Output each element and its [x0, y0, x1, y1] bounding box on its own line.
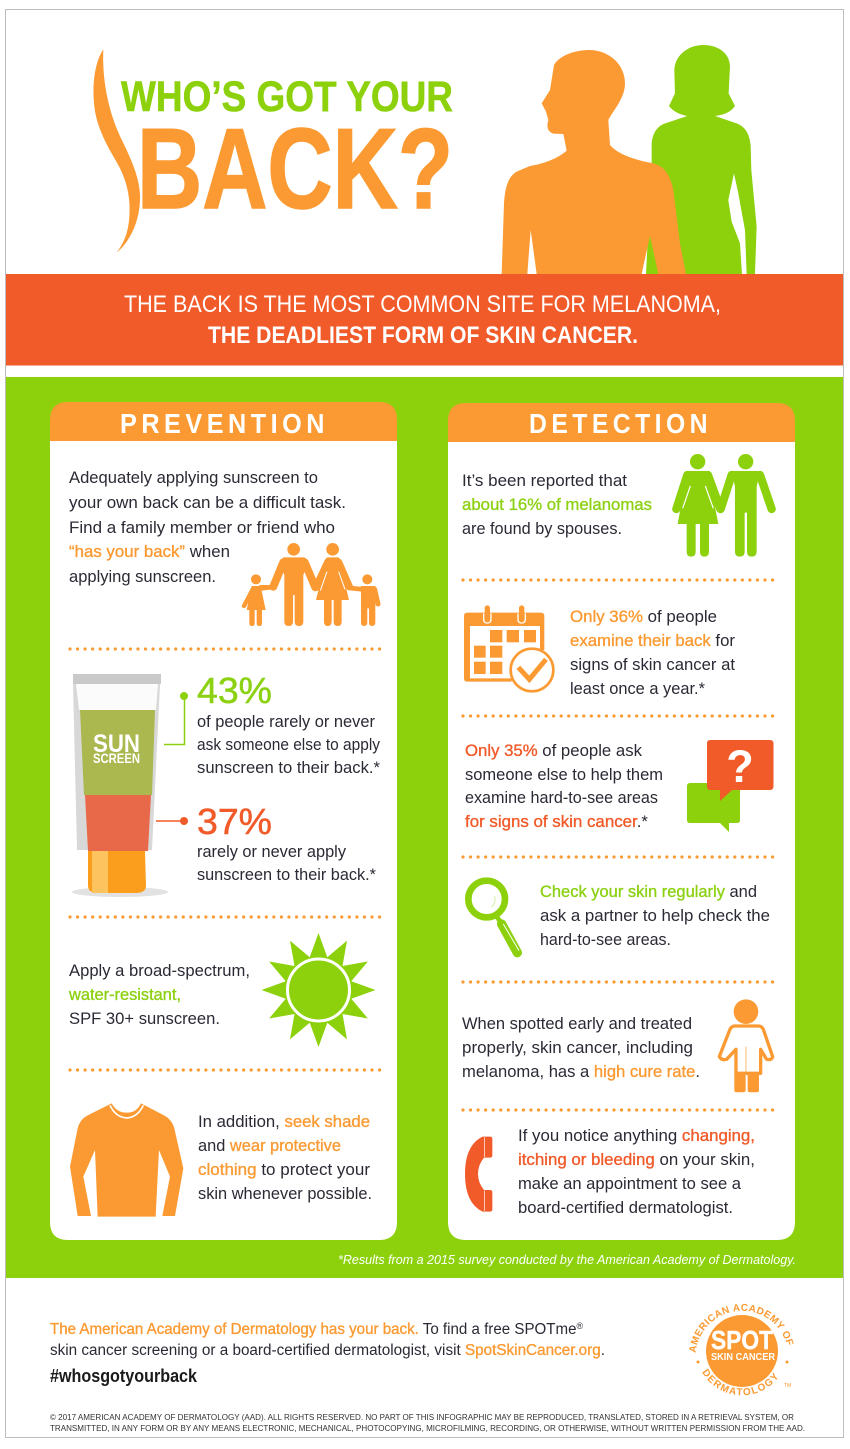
- text: applying sunscreen: Find a family member or friend who: [69, 518, 335, 537]
- label: sun screen: SUN: [93, 730, 140, 758]
- text: examine their back: examine their back for: [570, 631, 735, 650]
- icon: couple: [676, 454, 772, 557]
- logo: spot skin cancer: SKIN CANCER: [711, 1352, 776, 1363]
- copyright: TRANSMITTED, IN ANY FORM OR BY ANY MEANS ELECTRONIC, MECHANICAL, PHOTOCOPYING, MICROFILMING, RECORDING, OR OTHERWISE, WITHOUT WRITTEN PERMISSION FROM THE AAD.: [50, 1424, 805, 1433]
- banner: melanoma statement: THE DEADLIEST FORM OF SKIN CANCER.: [208, 322, 638, 349]
- footnote: *Results from a 2015 survey conducted by the American Academy of Dermatology.: [338, 1253, 796, 1267]
- text: applying sunscreen: Adequately applying sunscreen to: [69, 468, 318, 487]
- silhouette: woman: [646, 45, 757, 274]
- logo: spot skin cancer: TM: [784, 1383, 791, 1389]
- heading: prevention: PREVENTION: [120, 408, 329, 439]
- stat: 37%: 37%: [197, 801, 272, 842]
- icon: calendar with check: [464, 608, 553, 691]
- text: high cure rate: [462, 1014, 700, 1081]
- text: ask someone else: for signs of skin cancer.*: [465, 812, 648, 831]
- divider: [463, 1108, 776, 1112]
- title: [121, 73, 453, 233]
- text: check your skin: hard-to-see areas.: [540, 930, 671, 949]
- callout line: 37%: [156, 817, 188, 825]
- title line: who's got your: WHO’S GOT YOUR: [121, 73, 453, 121]
- text: examine their back: Only 36% of people: [570, 607, 717, 626]
- icon: sun: [262, 933, 376, 1047]
- divider: [463, 578, 776, 582]
- footer call to action: The American Academy of Dermatology has your back. To find a free SPOTme: [50, 1321, 581, 1338]
- copyright: [50, 1413, 805, 1433]
- text: broad spectrum: [68, 961, 250, 1028]
- stat: 43%: 43%: [197, 670, 272, 711]
- text: high cure rate: properly, skin cancer, including: [462, 1038, 693, 1057]
- heading: detection: DETECTION: [529, 408, 712, 439]
- footer call to action: skin cancer screening or a board-certified dermatologist, visit SpotSkinCancer.org.: [50, 1342, 605, 1359]
- text: spouses: about 16% of melanomas: [462, 495, 652, 514]
- text: spouses: It’s been reported that: [462, 471, 627, 490]
- hashtag: #whosgotyourback: [50, 1365, 198, 1386]
- icon: telephone: [465, 1137, 492, 1212]
- panel: prevention: [50, 402, 397, 1240]
- stat: 43%: [197, 670, 380, 777]
- silhouette: man: [502, 50, 686, 274]
- text: examine their back: [570, 607, 735, 698]
- text: examine their back: signs of skin cancer at: [570, 655, 735, 674]
- divider: [463, 980, 776, 984]
- text: high cure rate: When spotted early and treated: [462, 1014, 692, 1033]
- text: ask someone else: [465, 741, 663, 831]
- text: shade and clothing: skin whenever possible.: [198, 1184, 372, 1203]
- text: high cure rate: melanoma, has a high cure rate.: [462, 1062, 700, 1081]
- text: see a dermatologist: itching or bleeding on your skin,: [518, 1150, 755, 1169]
- text: shade and clothing: In addition, seek shade: [198, 1112, 370, 1131]
- logo: spot skin cancer: DERMATOLOGY: [702, 1368, 778, 1396]
- stat: 37%: sunscreen to their back.*: [197, 865, 376, 884]
- callout line: 43%: [164, 692, 188, 744]
- text: examine their back: least once a year.*: [570, 679, 705, 698]
- silhouettes: woman and man: [502, 45, 757, 274]
- text: applying sunscreen: “has your back” when: [69, 542, 230, 561]
- stat: 37%: rarely or never apply: [197, 842, 346, 861]
- title line: back: BACK?: [137, 106, 453, 233]
- copyright: © 2017 AMERICAN ACADEMY OF DERMATOLOGY (AAD). ALL RIGHTS RESERVED. NO PART OF THIS INFOGRAPHIC MAY BE REPRODUCED, TRANSLATED, STORED IN A RETRIEVAL SYSTEM, OR: [50, 1413, 794, 1422]
- logo: spot skin cancer: SPOT: [711, 1325, 773, 1355]
- divider: [70, 647, 380, 651]
- text: check your skin: ask a partner to help check the: [540, 906, 770, 925]
- logo: spot skin cancer: AMERICAN ACADEMY OF: [689, 1304, 794, 1353]
- text: shade and clothing: and wear protective: [198, 1136, 341, 1155]
- text: broad spectrum: Apply a broad-spectrum,: [69, 961, 250, 980]
- text: ask someone else: examine hard-to-see areas: [465, 788, 658, 807]
- icon: long sleeve shirt: [70, 1103, 183, 1217]
- panel: detection: [448, 403, 795, 1240]
- icon: speech bubbles: [687, 740, 774, 832]
- footer call to action: ®: [577, 1321, 583, 1331]
- divider: [70, 915, 380, 919]
- text: see a dermatologist: board-certified dermatologist.: [518, 1198, 733, 1217]
- banner: melanoma statement: [6, 274, 843, 366]
- logo: spot skin cancer: [689, 1304, 794, 1396]
- text: applying sunscreen: applying sunscreen.: [69, 567, 216, 586]
- stat: 43%: sunscreen to their back.*: [197, 758, 380, 777]
- text: see a dermatologist: If you notice anything changing,: [518, 1126, 755, 1145]
- icon: sunscreen tube: SCREEN: [93, 750, 140, 766]
- text: spouses: are found by spouses.: [462, 519, 622, 538]
- text: see a dermatologist: make an appointment to see a: [518, 1174, 742, 1193]
- text: broad spectrum: SPF 30+ sunscreen.: [69, 1009, 220, 1028]
- icon: magnifying glass: [468, 881, 519, 953]
- text: see a dermatologist: [518, 1126, 755, 1217]
- text: ask someone else: someone else to help them: [465, 765, 663, 784]
- icon: sunscreen tube: [72, 674, 168, 897]
- icon: back curve: [93, 49, 140, 253]
- banner: melanoma statement: THE BACK IS THE MOST COMMON SITE FOR MELANOMA,: [124, 291, 721, 318]
- divider: [463, 855, 776, 859]
- text: ask someone else: Only 35% of people ask: [465, 741, 642, 760]
- icon: doctor: [719, 999, 773, 1092]
- divider: [70, 1068, 380, 1072]
- stat: 43%: ask someone else to apply: [197, 735, 380, 754]
- text: broad spectrum: water-resistant,: [68, 985, 181, 1004]
- icon: speech bubbles: ?: [726, 741, 754, 792]
- stat: 37%: [197, 801, 376, 884]
- stat: 43%: of people rarely or never: [197, 712, 375, 731]
- text: spouses: [462, 471, 652, 538]
- text: applying sunscreen: your own back can be a difficult task.: [69, 493, 346, 512]
- footer call to action: [50, 1321, 605, 1359]
- icon: family: [244, 543, 378, 626]
- text: shade and clothing: [198, 1112, 372, 1203]
- divider: [463, 714, 776, 718]
- text: shade and clothing: clothing to protect your: [198, 1160, 370, 1179]
- green background panel: [6, 377, 843, 1278]
- text: check your skin: [540, 882, 770, 949]
- text: check your skin: Check your skin regularly and: [540, 882, 757, 901]
- text: applying sunscreen: [69, 468, 346, 586]
